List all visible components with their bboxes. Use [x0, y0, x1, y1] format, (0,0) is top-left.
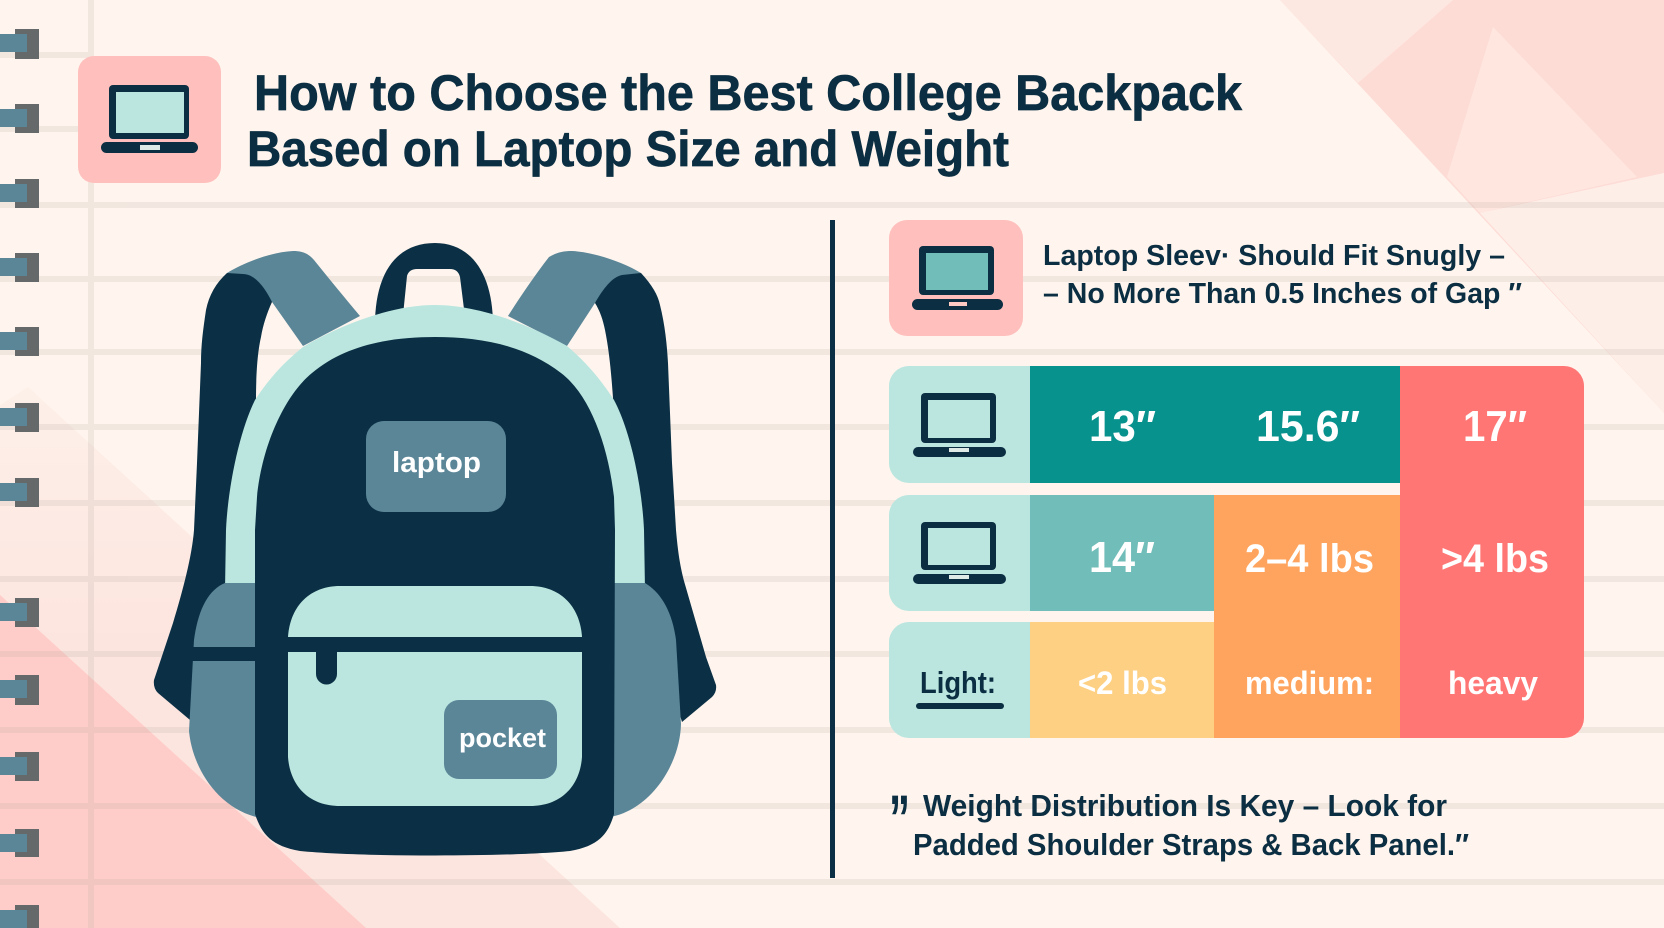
right back strap [595, 273, 716, 722]
sleeve fit text [1043, 240, 1522, 310]
icon: sleeve laptop [889, 220, 1023, 336]
row 3 label cell [889, 622, 1030, 738]
left side pocket [189, 583, 262, 817]
sleeve fit text: Laptop Sleev· Should Fit Snugly – [1043, 240, 1505, 272]
size and weight table: Light: [920, 665, 996, 700]
title [247, 65, 1242, 177]
teal size cell [1030, 366, 1400, 483]
pocket label [444, 700, 557, 779]
size and weight table: <2 lbs [1078, 665, 1167, 701]
weight distribution quote [889, 781, 1469, 862]
backpack illustration [154, 243, 716, 856]
main compartment [255, 337, 615, 856]
size and weight table: 17″ [1463, 402, 1527, 451]
icon: row 1 laptop [913, 393, 1006, 457]
row 2 label cell [889, 495, 1030, 611]
size and weight table: 14″ [1089, 533, 1155, 582]
left back strap [154, 273, 272, 720]
title: How to Choose the Best College Backpack [254, 65, 1242, 121]
pocket label: pocket [459, 723, 546, 753]
icon: row 2 laptop [913, 522, 1006, 584]
mint body rim [225, 305, 645, 590]
size and weight table: 15.6″ [1256, 402, 1360, 451]
left shoulder strap [227, 251, 360, 346]
title: Based on Laptop Size and Weight [247, 121, 1009, 177]
right shoulder strap [508, 251, 641, 346]
notebook binding holes [0, 29, 39, 928]
vertical divider [830, 220, 835, 878]
laptop label: laptop [392, 447, 481, 479]
top handle [375, 243, 493, 325]
row 1 label cell [889, 366, 1030, 483]
coral column [1400, 366, 1584, 738]
weight distribution quote: ” [889, 781, 910, 855]
size labels: 13″ [1089, 402, 1156, 451]
size and weight table: medium: [1245, 665, 1374, 701]
weight distribution quote: Weight Distribution Is Key – Look for [923, 788, 1447, 823]
laptop label [366, 421, 506, 512]
icon: header laptop [78, 56, 221, 183]
front pocket [288, 586, 582, 806]
yellow weight cell [1030, 622, 1214, 738]
size and weight table [889, 366, 1584, 738]
mid teal size cell [1030, 495, 1214, 611]
right side pocket [605, 583, 681, 817]
sleeve fit text: – No More Than 0.5 Inches of Gap ″ [1043, 278, 1522, 310]
weight distribution quote: Padded Shoulder Straps & Back Panel.″ [913, 827, 1469, 862]
size and weight table: heavy [1448, 665, 1538, 701]
size and weight table: >4 lbs [1441, 537, 1549, 581]
orange weight cell [1214, 495, 1400, 738]
size and weight table: 2–4 lbs [1245, 537, 1374, 581]
